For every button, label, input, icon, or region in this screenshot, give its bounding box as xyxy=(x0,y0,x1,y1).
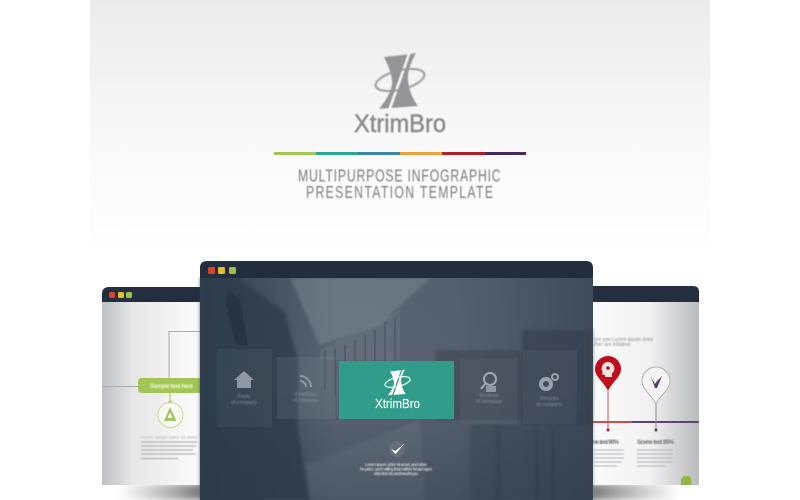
card: feedback: Feedback xyxy=(295,392,317,398)
body text: Lorem ipsum dolor sit amet xyxy=(141,434,198,440)
shelves xyxy=(435,330,593,500)
card: services: of company xyxy=(536,402,562,408)
card: reviews: of company xyxy=(476,399,502,405)
body text: ore you Lorem ipsum dolor xyxy=(594,337,654,343)
background panel xyxy=(90,0,710,300)
caption: Lorem ipsum dolor sit amet, and other xyxy=(365,462,428,467)
left slide window xyxy=(102,287,205,485)
caption: dolor sit amet, used need to you xyxy=(374,471,418,476)
colour rule xyxy=(274,152,526,155)
green label xyxy=(138,378,205,393)
card: reviews: Reviews xyxy=(480,393,499,399)
card: feedback: of company xyxy=(293,398,319,404)
logo mark: white xyxy=(384,370,411,395)
card: feedback xyxy=(277,357,335,419)
man in suit xyxy=(200,278,310,500)
window buttons xyxy=(208,267,236,274)
windows xyxy=(325,318,395,400)
papers xyxy=(305,420,425,500)
title: MULTIPURPOSE INFOGRAPHIC xyxy=(298,166,501,186)
stat labels: ene text 90% xyxy=(590,440,620,446)
caption xyxy=(360,462,433,476)
title bar xyxy=(200,261,593,278)
icon: house xyxy=(234,371,254,388)
icon: head xyxy=(602,362,614,377)
logo wordmark: white: XtrimBro xyxy=(375,396,420,411)
logo wordmark: XtrimBro xyxy=(354,110,446,138)
red pin xyxy=(595,356,621,432)
stat labels xyxy=(590,440,675,446)
icon: magnifier xyxy=(481,373,496,392)
icon: rss xyxy=(300,376,311,387)
icon: gears xyxy=(541,374,558,389)
tie xyxy=(226,290,248,345)
card: services xyxy=(523,350,577,424)
body text xyxy=(141,434,198,458)
icon: check mark xyxy=(389,441,405,457)
outlined pin xyxy=(642,367,670,432)
right slide window xyxy=(590,286,699,485)
icon: check xyxy=(651,376,662,388)
green label: Sample text here xyxy=(150,384,194,390)
logo: XtrimBro xyxy=(354,53,446,138)
floor shadows xyxy=(118,484,680,500)
centre slide window xyxy=(200,261,593,500)
card: facts: of company xyxy=(231,400,257,406)
title xyxy=(298,166,501,203)
card: facts: Facts xyxy=(238,394,251,400)
stat labels: Scene text 85% xyxy=(637,440,675,446)
body text: ther are initiative xyxy=(594,342,631,348)
logo mark xyxy=(373,53,427,109)
card: reviews xyxy=(460,358,517,424)
title: PRESENTATION TEMPLATE xyxy=(306,183,493,203)
green page tag xyxy=(681,476,692,485)
card: services: Services xyxy=(539,396,559,402)
icon: recycling in circle xyxy=(158,393,183,428)
office ceiling and wall xyxy=(290,278,430,345)
caption: he price, such willing that neither broad ages xyxy=(360,466,433,472)
connector lines xyxy=(102,332,205,386)
card: facts xyxy=(217,349,272,427)
card: teal logo xyxy=(339,361,454,419)
stat body text xyxy=(594,450,673,466)
window buttons xyxy=(109,292,132,298)
timeline xyxy=(590,421,699,423)
slide background photo xyxy=(200,276,593,500)
